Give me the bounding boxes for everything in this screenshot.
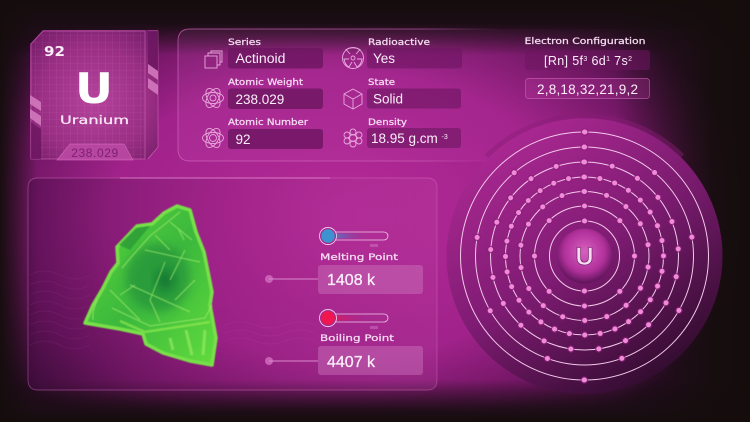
electron configuration heading: Electron Configuration bbox=[524, 37, 646, 47]
electron configuration value bbox=[525, 50, 650, 70]
melting connector bbox=[265, 275, 318, 283]
radioactive field: Radioactive bbox=[368, 38, 430, 48]
state field bbox=[367, 78, 461, 108]
card atomic weight: 238.029 bbox=[71, 146, 119, 160]
electrons bbox=[460, 132, 708, 380]
Bohr model bbox=[446, 116, 722, 394]
radioactive field bbox=[367, 38, 462, 68]
melting point thermometer bbox=[320, 228, 388, 247]
melting point label: Melting Point bbox=[320, 253, 399, 263]
atomic number field: 92 bbox=[236, 132, 251, 147]
element name: Uranium bbox=[60, 113, 129, 127]
boiling connector bbox=[265, 357, 318, 365]
state field: State bbox=[368, 78, 395, 88]
panel: properties bbox=[178, 29, 720, 161]
icon: series layers bbox=[205, 51, 222, 68]
electron configuration value: 3 bbox=[583, 56, 587, 63]
state field: Solid bbox=[373, 92, 403, 106]
electron configuration value: 1 bbox=[606, 56, 610, 63]
series field: Series bbox=[228, 38, 262, 48]
density field: Density bbox=[368, 118, 407, 128]
series field bbox=[228, 38, 323, 68]
icon: radioactive bbox=[342, 48, 364, 68]
element symbol: U bbox=[75, 64, 113, 113]
electron configuration value: [Rn] 5f bbox=[544, 54, 583, 68]
series field: Actinoid bbox=[236, 51, 286, 66]
icon: atom bbox=[202, 86, 224, 110]
electrons per shell bbox=[526, 78, 650, 98]
boiling point value: 4407 k bbox=[327, 354, 376, 371]
nucleus: U bbox=[575, 243, 594, 271]
icon: density cluster bbox=[344, 129, 362, 147]
electron configuration value: 6d bbox=[588, 54, 606, 68]
electron configuration value: 2 bbox=[628, 56, 632, 63]
boiling point value bbox=[318, 346, 423, 375]
boiling point label: Boiling Point bbox=[320, 334, 395, 344]
atomic number field: Atomic Number bbox=[228, 118, 309, 128]
uranium mineral sample bbox=[85, 206, 216, 365]
icon: atom bbox=[202, 126, 224, 150]
melting point value: 1408 k bbox=[327, 272, 376, 289]
icon: cube bbox=[344, 89, 362, 109]
electron configuration value: 7s bbox=[610, 54, 628, 68]
atomic weight field bbox=[228, 78, 323, 109]
nucleus bbox=[557, 228, 612, 284]
melting point value bbox=[318, 265, 423, 294]
electrons per shell: 2,8,18,32,21,9,2 bbox=[537, 82, 638, 97]
atomic weight field: Atomic Weight bbox=[228, 78, 304, 88]
boiling point thermometer bbox=[320, 310, 388, 329]
element number: 92 bbox=[44, 45, 65, 60]
density field: 18.95 g.cm bbox=[371, 131, 438, 146]
density field bbox=[367, 118, 461, 148]
electron shell rings bbox=[460, 132, 708, 380]
density field: -3 bbox=[442, 134, 448, 141]
atomic weight field: 238.029 bbox=[236, 92, 284, 107]
panel: sample and temperatures bbox=[28, 178, 437, 390]
atomic number field bbox=[228, 118, 323, 149]
radioactive field: Yes bbox=[373, 51, 395, 66]
panel: element card bbox=[30, 30, 158, 160]
